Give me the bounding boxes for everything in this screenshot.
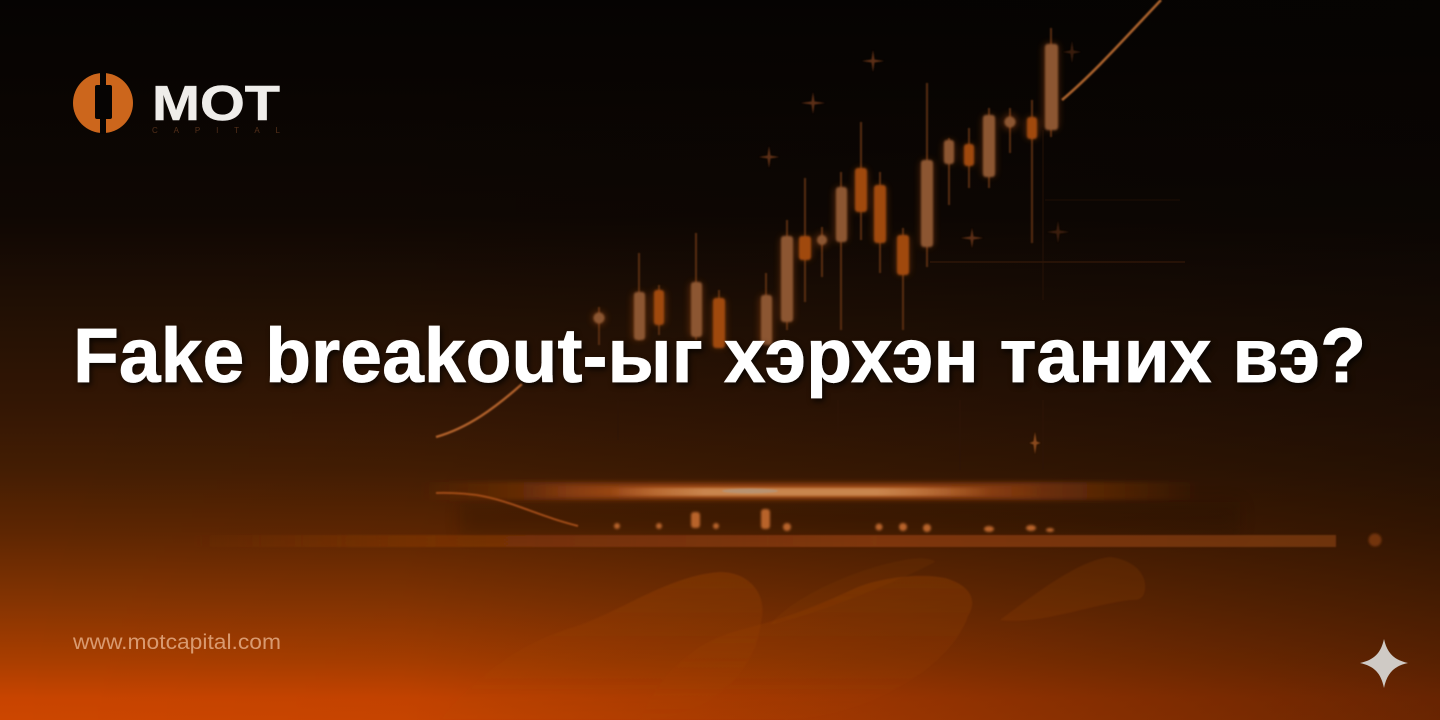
reflected candles (614, 509, 1054, 532)
chart grid lines (618, 130, 1185, 470)
sparkles (759, 41, 1081, 454)
smoke waves (440, 557, 1145, 720)
trend line upper (1062, 0, 1161, 100)
website url: www.motcapital.com (72, 631, 281, 654)
candlestick chart (592, 28, 1059, 348)
light candles (594, 44, 1058, 345)
logo subtitle: CAPITAL (152, 126, 281, 135)
icon: four-point star (1360, 639, 1408, 688)
dark reflection zone (460, 502, 1240, 534)
reflected glow (420, 482, 1200, 500)
reflected trend line (436, 493, 578, 526)
orange candles (654, 117, 1037, 348)
reflective band (190, 534, 1382, 547)
title: Fake breakout-ыг хэрхэн таних вэ? (73, 313, 1366, 399)
trend line lower (436, 384, 522, 437)
logo icon (73, 72, 133, 134)
logo wordmark: MOT (152, 77, 280, 131)
logo (73, 72, 281, 135)
